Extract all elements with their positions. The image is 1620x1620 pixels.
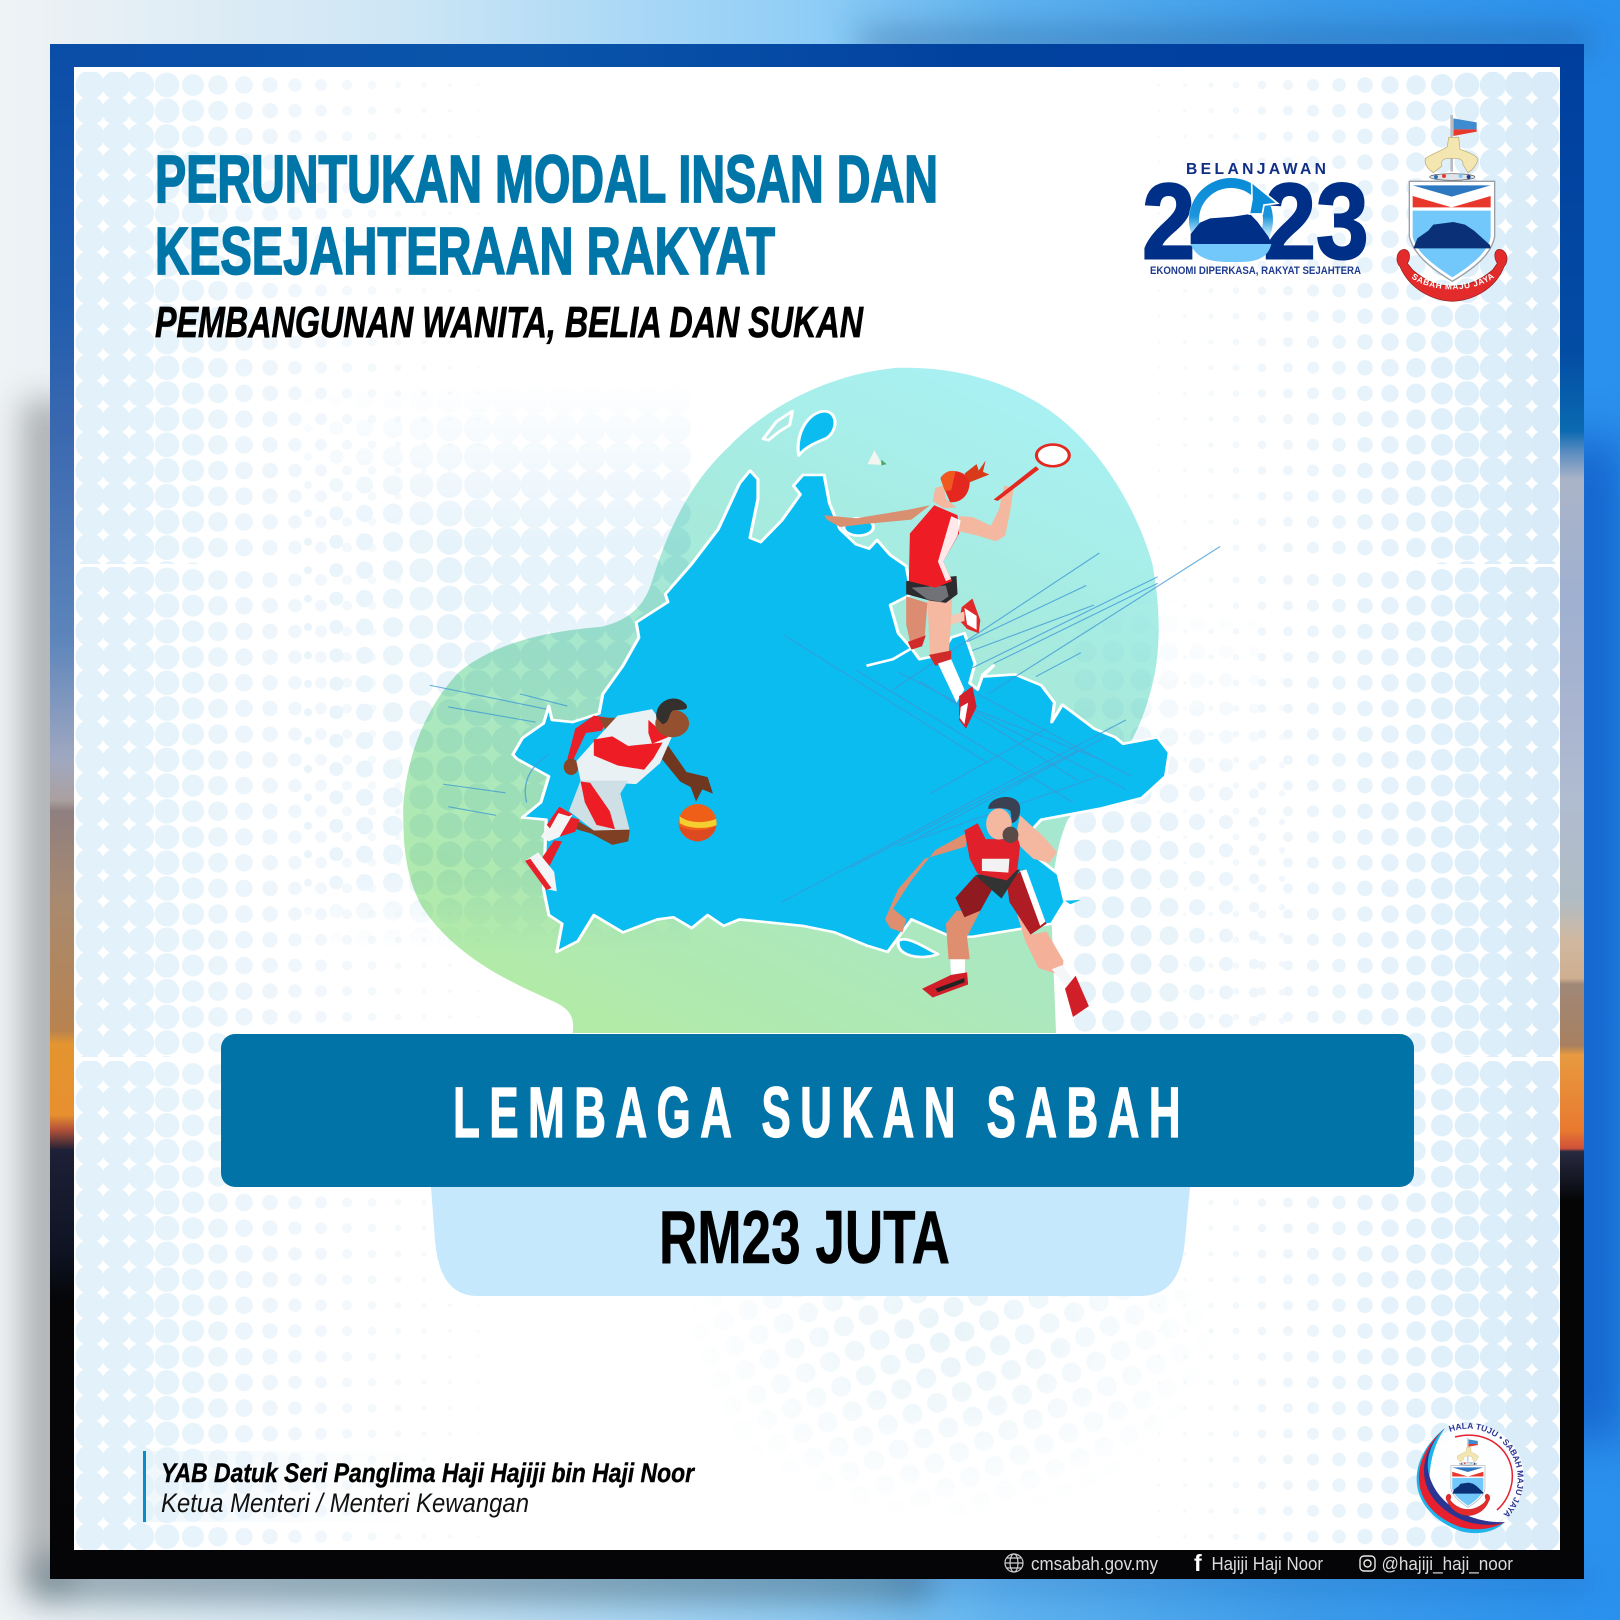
- signature block: Ketua Menteri / Menteri Kewangan: [161, 1488, 529, 1518]
- logo: Belanjawan 2023: [1142, 161, 1369, 281]
- icon: globe: [1005, 1554, 1023, 1572]
- logo: Hala Tuju Sabah Maju Jaya: HALA TUJU • SABAH MAJU JAYA: [1448, 1422, 1524, 1516]
- footer links: @hajiji_haji_noor: [1382, 1554, 1513, 1575]
- athlete: basketball player: [525, 698, 717, 891]
- illustration: map and athletes: [403, 368, 1220, 1033]
- title: [155, 142, 938, 289]
- green blob: [403, 368, 1159, 1033]
- amount panel: RM23 JUTA: [659, 1195, 950, 1279]
- title: PERUNTUKAN MODAL INSAN DAN: [155, 142, 938, 217]
- subtitle: PEMBANGUNAN WANITA, BELIA DAN SUKAN: [155, 298, 864, 347]
- logo: Hala Tuju Sabah Maju Jaya: [1416, 1422, 1524, 1534]
- amount panel: [431, 1187, 1190, 1296]
- logo: Sabah coat of arms: [1396, 115, 1508, 302]
- footer links: [1005, 1550, 1513, 1576]
- footer links: Hajiji Haji Noor: [1212, 1554, 1323, 1574]
- icon: instagram: [1360, 1556, 1375, 1571]
- title: KESEJAHTERAAN RAKYAT: [155, 214, 775, 289]
- footer links: f: [1194, 1550, 1202, 1576]
- logo: Belanjawan 2023: EKONOMI DIPERKASA, RAKYAT SEJAHTERA: [1150, 265, 1361, 277]
- logo: Belanjawan 2023: 2: [1142, 161, 1195, 281]
- map of Sabah: [513, 411, 1169, 957]
- logo: Belanjawan 2023: BELANJAWAN: [1186, 161, 1326, 178]
- logo: Sabah coat of arms: SABAH MAJU JAYA: [1412, 274, 1494, 290]
- speed lines: [430, 546, 1220, 902]
- athlete: shot put thrower: [885, 797, 1089, 1017]
- signature block: [143, 1451, 695, 1522]
- logo: Belanjawan 2023: 23: [1263, 161, 1369, 281]
- signature block: YAB Datuk Seri Panglima Haji Hajiji bin Haji Noor: [161, 1458, 695, 1488]
- banner: Lembaga Sukan Sabah: [221, 1034, 1414, 1187]
- banner: Lembaga Sukan Sabah: LEMBAGA SUKAN SABAH: [453, 1074, 1190, 1153]
- footer links: cmsabah.gov.my: [1031, 1554, 1158, 1574]
- athlete: badminton player: [824, 445, 1069, 729]
